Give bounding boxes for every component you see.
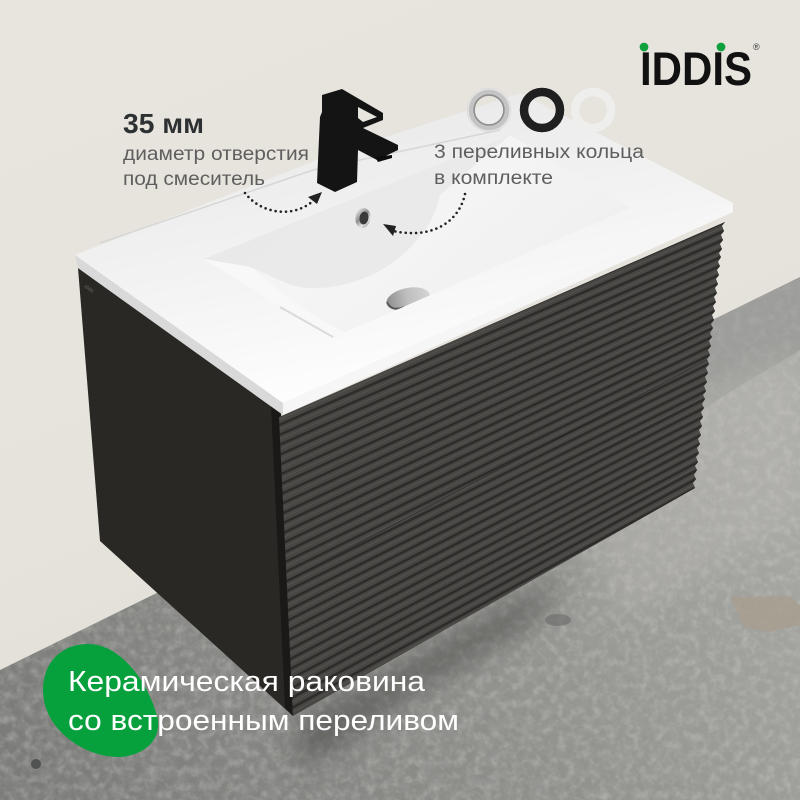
countertop left edge: [75, 255, 283, 415]
tap body with spout and handle: [317, 89, 398, 192]
tap handle opening: [358, 107, 377, 122]
dotted arrow: overflow ring: [383, 194, 465, 236]
countertop front edge: [283, 203, 733, 415]
basin slope line: [280, 307, 333, 337]
tap aerator: [375, 155, 392, 162]
cabinet side panel: [78, 268, 293, 716]
logo wordmark: IDDIS: [640, 42, 752, 95]
caption: in set: в комплекте: [434, 168, 553, 189]
caption: for mixer: под смеситель: [123, 169, 265, 190]
logo dot left: [640, 43, 648, 51]
three overflow rings: [468, 89, 611, 131]
dotted arrow: tap hole: [245, 192, 322, 212]
heading: 35 mm: 35 мм: [123, 108, 204, 139]
ring: chrome: [468, 89, 510, 131]
countertop surface: [75, 93, 733, 403]
text block: three rings included: [434, 142, 644, 189]
ring: white: [575, 92, 611, 128]
cabinet corner shadow strip: [271, 406, 293, 716]
headline line 1: Керамическая раковина: [68, 666, 426, 698]
logo: IDDIS: [640, 42, 760, 95]
overflow hole: [354, 207, 372, 229]
headline: [68, 666, 459, 737]
headline line 2: со встроенным переливом: [68, 705, 459, 737]
caption: three rings: 3 переливных кольца: [434, 142, 644, 163]
black mixer tap: [317, 89, 398, 192]
text block: hole diameter: [123, 108, 309, 190]
logo registered mark: ®: [753, 42, 760, 52]
basin curve shading: [204, 135, 510, 288]
ceramic washbasin: [75, 93, 733, 415]
basin bowl: [204, 135, 630, 338]
logo dot right: [717, 43, 725, 51]
back deck ridge: [100, 130, 500, 243]
small logo on side: iddis: [83, 284, 95, 295]
stone floor and skirting: [0, 250, 800, 800]
drain plug: [386, 287, 430, 310]
vanity cabinet: [78, 215, 730, 720]
basin inner slope: [204, 259, 345, 338]
caption: hole diameter: диаметр отверстия: [123, 144, 309, 165]
cabinet ribbed front: [270, 215, 730, 720]
ring: black: [524, 92, 560, 128]
green blob: [43, 644, 158, 757]
